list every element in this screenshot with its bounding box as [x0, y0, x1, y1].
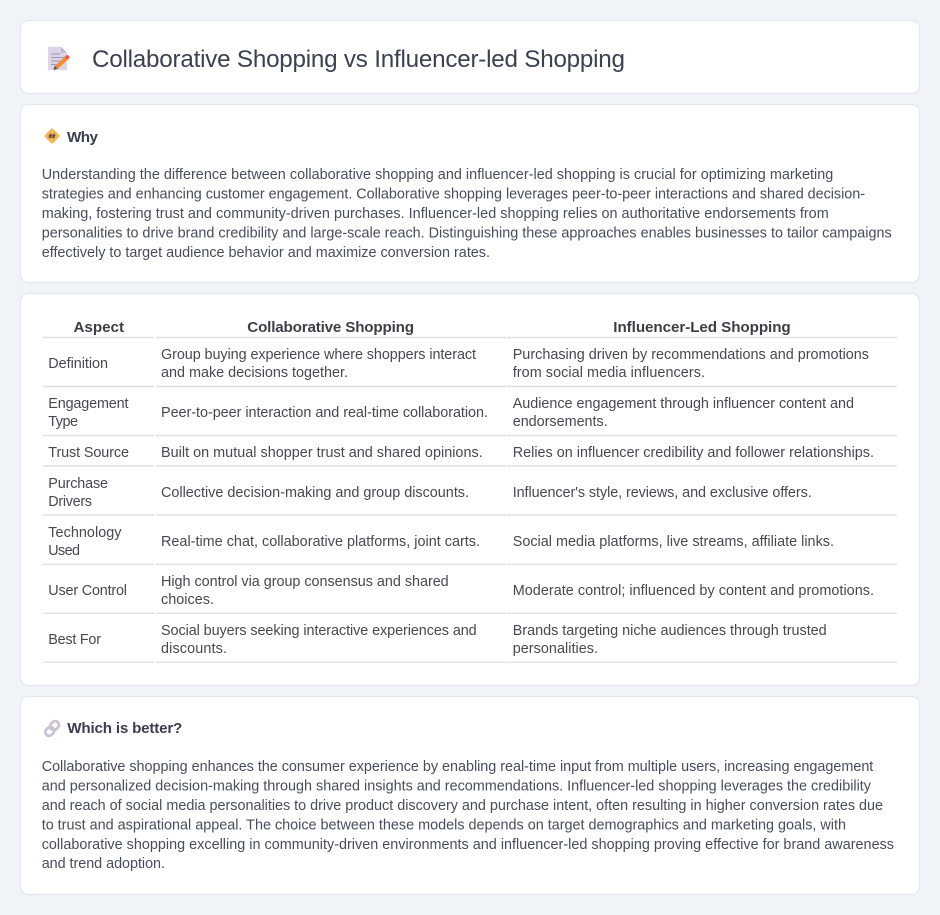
- table row: purchase drivers: Influencer's style, reviews, and exclusive offers.: [513, 485, 812, 501]
- table row: best for: [43, 623, 897, 662]
- table row: purchase drivers: Drivers: [48, 494, 92, 510]
- table header row: Aspect: [74, 319, 124, 336]
- table row: user control: Moderate control; influenced by content and promotions.: [513, 583, 874, 599]
- heading: why: Why: [67, 129, 99, 146]
- table row: user control: High control via group consensus and shared: [161, 574, 449, 590]
- table row: trust source: Built on mutual shopper trust and shared opinions.: [161, 445, 483, 461]
- table row: technology used: Social media platforms, live streams, affiliate links.: [513, 534, 834, 550]
- title: Collaborative Shopping vs Influencer-led Shopping: [92, 46, 625, 73]
- text block: which is better paragraph: collaborative shopping excelling in community-driven environments and influencer-led shopping proving effective for brand awareness: [42, 837, 894, 853]
- panel: comparison table card: [20, 294, 920, 686]
- icon: document with pencil: [48, 47, 69, 70]
- table row: engagement type: Type: [48, 414, 78, 430]
- text block: why paragraph: effectively to target audience behavior and maximize conversion rates.: [42, 245, 490, 261]
- table row: definition: Definition: [48, 356, 108, 372]
- text block: which is better paragraph: to trust and aspirational appeal. The choice between these models depends on target demographics and marketing goals, with: [42, 817, 846, 833]
- text block: why paragraph: strategies and enhancing customer engagement. Collaborative shopping leverages peer-to-peer interactions and shared decision-: [42, 186, 865, 202]
- table row: best for: Social buyers seeking interactive experiences and: [161, 623, 477, 639]
- table row: best for: Best For: [48, 632, 101, 648]
- table row: user control: [43, 574, 897, 613]
- table row: trust source: Relies on influencer credibility and follower relationships.: [513, 445, 874, 461]
- table row: best for: personalities.: [513, 641, 598, 657]
- table row: technology used: Real-time chat, collaborative platforms, joint carts.: [161, 534, 480, 550]
- table row: definition: Group buying experience where shoppers interact: [161, 347, 476, 363]
- table row: definition: [43, 347, 897, 386]
- table row: user control: User Control: [48, 583, 127, 599]
- table row: definition: from social media influencers.: [513, 365, 705, 381]
- table row: technology used: Technology: [48, 525, 122, 541]
- text block: which is better paragraph: and personalized decision-making through shared insights and recommendations. Influencer-led shopping leverages the credibility: [42, 778, 872, 794]
- table row: user control: choices.: [161, 592, 214, 608]
- heading: which is better: Which is better?: [67, 720, 182, 737]
- icon: warning diamond: [44, 128, 60, 144]
- table row: technology used: Used: [48, 543, 80, 559]
- table header row: Collaborative Shopping: [247, 319, 414, 336]
- table row: best for: discounts.: [161, 641, 227, 657]
- text block: which is better paragraph: and trend adoption.: [42, 856, 165, 872]
- table row: engagement type: Engagement: [48, 396, 128, 412]
- table header row: [43, 319, 897, 338]
- text block: which is better paragraph: and reach of social media personalities to drive product discovery and purchase intent, often resulting in higher conversion rates due: [42, 798, 883, 814]
- text block: which is better paragraph: Collaborative shopping enhances the consumer experience by enabling real-time input from multiple users, increasing engagement: [42, 759, 873, 775]
- table row: technology used: [43, 525, 897, 564]
- table row: definition: and make decisions together.: [161, 365, 348, 381]
- table header row: Influencer-Led Shopping: [613, 319, 791, 336]
- table row: engagement type: Audience engagement through influencer content and: [513, 396, 854, 412]
- text block: why paragraph: [42, 167, 892, 261]
- table row: engagement type: Peer-to-peer interaction and real-time collaboration.: [161, 405, 488, 421]
- panel: why: [20, 104, 920, 282]
- table row: purchase drivers: Purchase: [48, 476, 108, 492]
- table row: definition: Purchasing driven by recommendations and promotions: [513, 347, 869, 363]
- table row: engagement type: [43, 396, 897, 436]
- table row: best for: Brands targeting niche audiences through trusted: [513, 623, 827, 639]
- table row: trust source: Trust Source: [48, 445, 129, 461]
- text block: why paragraph: personalities to drive brand credibility and large-scale reach. Distinguishing these approaches enables businesses to tailor campaigns: [42, 225, 892, 241]
- panel: title card: [20, 20, 920, 94]
- table row: engagement type: endorsements.: [513, 414, 608, 430]
- text block: why paragraph: Understanding the difference between collaborative shopping and influencer-led shopping is crucial for optimizing marketing: [42, 167, 833, 183]
- text block: which is better paragraph: [42, 759, 894, 872]
- text block: why paragraph: making, fostering trust and community-driven purchases. Influencer-led shopping relies on authoritative endorsements from: [42, 206, 829, 222]
- table row: trust source: [43, 445, 897, 466]
- panel: which is better: [20, 696, 920, 894]
- icon: chain link: [44, 720, 61, 737]
- table row: purchase drivers: Collective decision-making and group discounts.: [161, 485, 469, 501]
- table row: purchase drivers: [43, 476, 897, 515]
